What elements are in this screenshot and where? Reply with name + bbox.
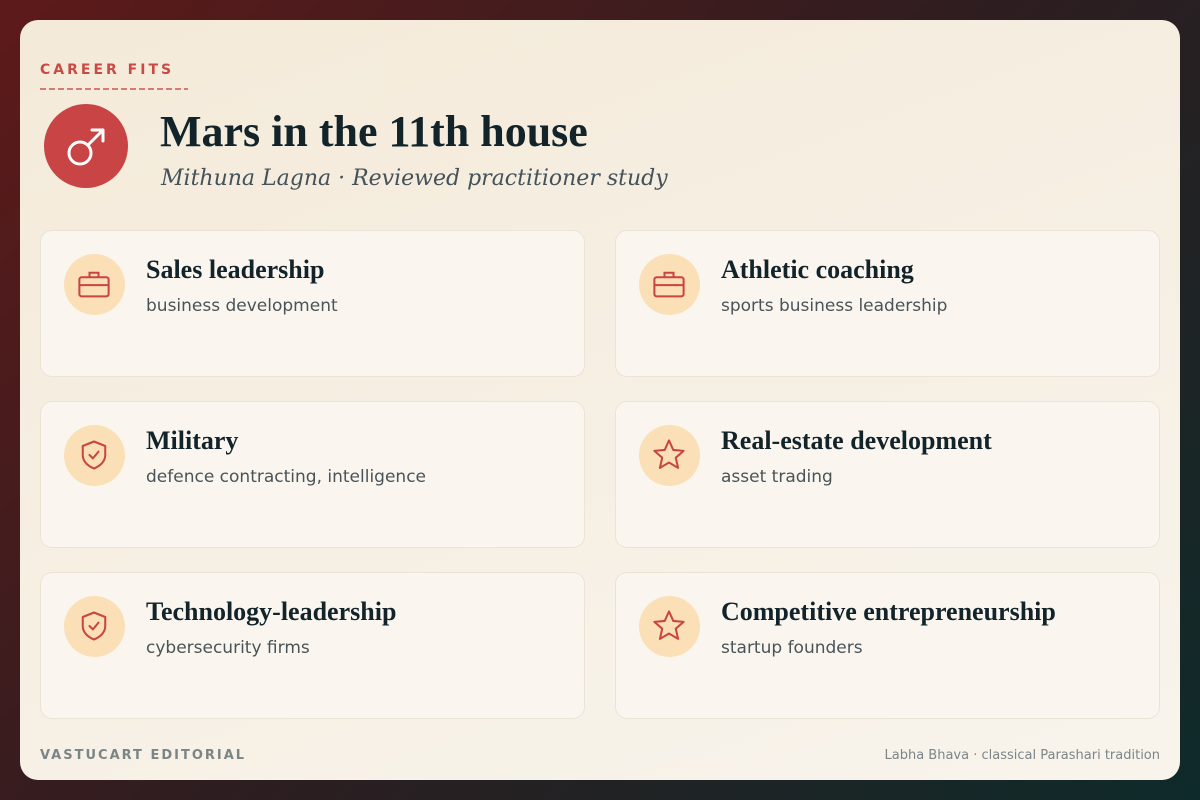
icon: briefcase <box>64 254 125 315</box>
panel: sales leadership: Sales leadership <box>146 255 324 284</box>
panel: real-estate: asset trading <box>721 467 833 487</box>
panel: real-estate: Real-estate development <box>721 426 992 455</box>
panel: technology leadership: cybersecurity firms <box>146 638 310 658</box>
icon: mars symbol <box>44 104 128 188</box>
panel: sales leadership: business development <box>146 296 338 316</box>
panel: military: defence contracting, intelligence <box>146 467 426 487</box>
icon: star <box>639 596 700 657</box>
panel: entrepreneurship: startup founders <box>721 638 863 658</box>
icon: briefcase <box>639 254 700 315</box>
panel: athletic coaching <box>615 230 1160 377</box>
panel: entrepreneurship <box>615 572 1160 719</box>
panel: real-estate <box>615 401 1160 548</box>
panel: military <box>40 401 585 548</box>
panel: entrepreneurship: Competitive entrepreneurship <box>721 597 1056 626</box>
panel: technology leadership: Technology-leadership <box>146 597 396 626</box>
icon: shield <box>64 425 125 486</box>
panel: technology leadership <box>40 572 585 719</box>
subtitle: Mithuna Lagna · Reviewed practitioner study <box>161 166 668 191</box>
title: Mars in the 11th house <box>160 107 588 156</box>
footer left: VASTUCART EDITORIAL <box>40 748 246 763</box>
footer right: Labha Bhava · classical Parashari tradition <box>884 748 1160 763</box>
panel: athletic coaching: Athletic coaching <box>721 255 914 284</box>
panel: military: Military <box>146 426 238 455</box>
kicker: career fits: CAREER FITS <box>40 62 174 78</box>
panel: sales leadership <box>40 230 585 377</box>
icon: star <box>639 425 700 486</box>
panel: athletic coaching: sports business leadership <box>721 296 947 316</box>
icon: shield <box>64 596 125 657</box>
